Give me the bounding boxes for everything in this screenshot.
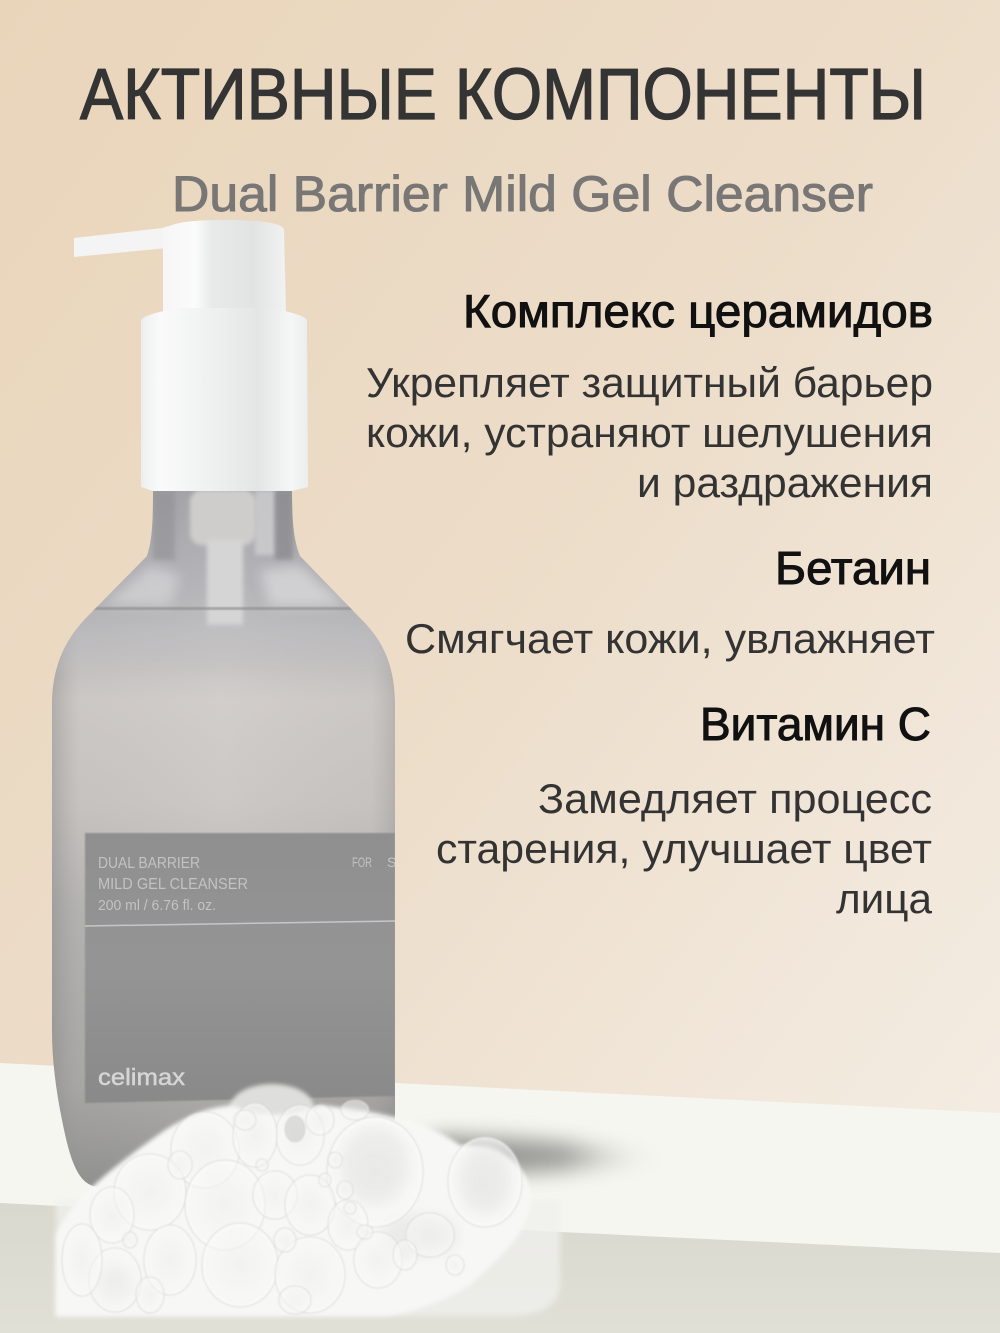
description: betaine: Смягчает кожи, увлажняет [405,615,935,662]
label product name [98,857,395,910]
label divider [85,921,395,926]
bottle body [40,485,410,1195]
heading: ceramides: Комплекс церамидов [463,285,933,337]
description: ceramides: кожи, устраняют шелушения [366,409,933,456]
description: vitamin C: Замедляет процесс [538,775,932,822]
product bottle [40,220,410,1195]
shelf front face [0,1203,1000,1333]
foam top bubble [230,1084,314,1132]
pump collar [141,308,308,491]
description: vitamin C: старения, улучшает цвет [436,825,932,872]
foam shading [95,1127,511,1303]
foam bubbles [62,1100,522,1314]
foam soft patch [56,1200,560,1316]
subtitle: Dual Barrier Mild Gel Cleanser [172,166,873,222]
description: ceramides: Укрепляет защитный барьер [366,359,933,406]
ingredient: ceramide complex [366,285,933,506]
label product name: 200 ml / 6.76 fl. oz. [98,898,216,914]
label brand celimax: celimax [98,1064,186,1090]
heading: vitamin C: Витамин С [700,698,931,750]
description: vitamin C: лица [836,875,933,922]
label product name: DUAL BARRIER [98,855,200,872]
description: ceramides [366,359,933,506]
pump nozzle [74,226,168,257]
label product name: SE [387,854,406,870]
ingredient: vitamin C [436,698,933,922]
front label panel [85,833,406,1103]
foam mass [56,1105,531,1316]
ingredient: betaine [405,542,935,662]
description: ceramides: и раздражения [637,459,933,506]
label product name: MILD GEL CLEANSER [98,876,248,893]
foam [56,1084,560,1316]
description: vitamin C [436,775,933,922]
white shelf top [0,1063,1000,1253]
heading: betaine: Бетаин [775,542,931,594]
pump head [163,220,286,312]
label product name: FOR [352,854,372,870]
bottle shadow on shelf [430,1136,672,1178]
title: АКТИВНЫЕ КОМПОНЕНТЫ [80,55,926,135]
